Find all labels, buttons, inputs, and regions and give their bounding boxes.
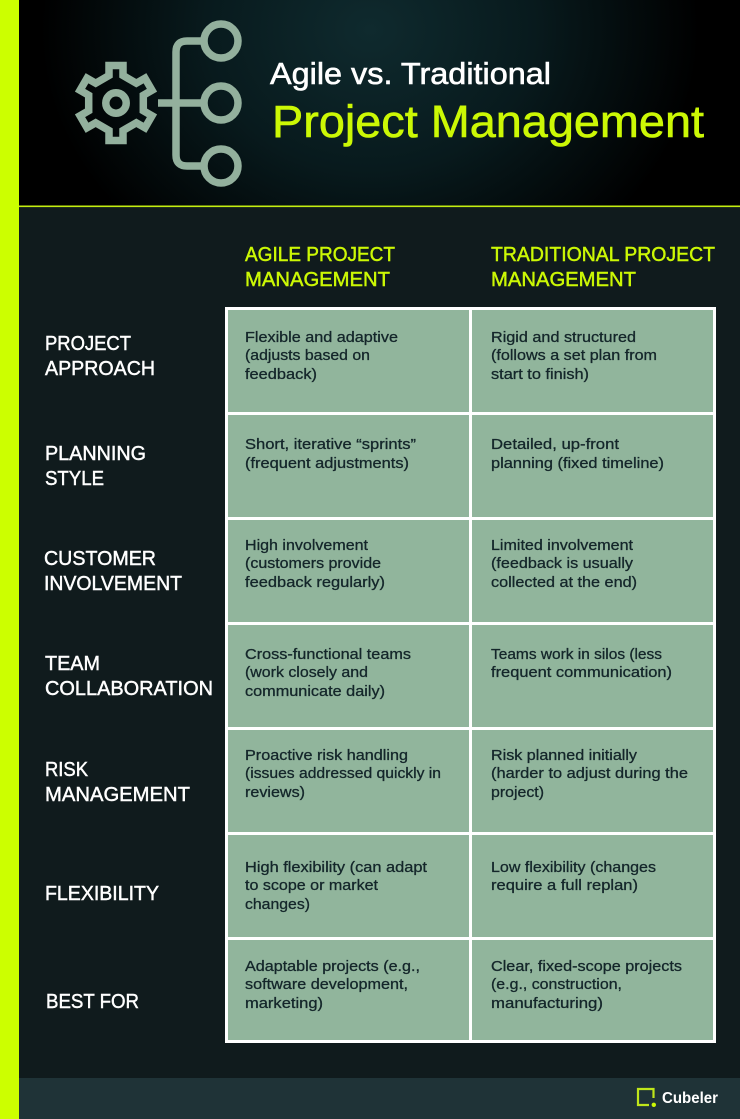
- cell: traditional collaboration: [491, 646, 672, 681]
- column heading: traditional: MANAGEMENT: [491, 269, 636, 291]
- cell: agile planning: Short, iterative “sprints”: [245, 436, 416, 453]
- cell: agile flexibility: [245, 859, 428, 913]
- cell: agile approach: (adjusts based on: [245, 347, 370, 364]
- cell: traditional customer involvement: [491, 537, 637, 591]
- cell: traditional planning: planning (fixed timeline): [491, 455, 664, 472]
- cell: traditional approach: [491, 329, 657, 383]
- cell: traditional collaboration: Teams work in silos (less: [491, 646, 662, 663]
- row label: planning style: PLANNING: [45, 443, 146, 465]
- title: [270, 56, 705, 147]
- lime side bar: [0, 0, 19, 1119]
- cell: agile best for: Adaptable projects (e.g.,: [245, 958, 420, 975]
- cell: traditional customer involvement: Limited involvement: [491, 537, 634, 554]
- row label: team collaboration: [45, 653, 213, 700]
- row label: risk management: [45, 759, 190, 806]
- cell: traditional best for: Clear, fixed-scope projects: [491, 958, 682, 975]
- row label: team collaboration: COLLABORATION: [45, 678, 213, 700]
- row label: project approach: APPROACH: [45, 358, 155, 380]
- cell: traditional collaboration: frequent communication): [491, 664, 672, 681]
- cell: agile collaboration: [245, 646, 411, 700]
- cell: traditional planning: [491, 436, 664, 472]
- cell: agile flexibility: changes): [245, 896, 310, 913]
- row label: planning style: STYLE: [45, 468, 104, 490]
- cell: agile customer involvement: (customers provide: [245, 555, 381, 572]
- title: Agile vs. Traditional: [270, 56, 551, 91]
- row label: flexibility: FLEXIBILITY: [45, 883, 159, 905]
- cell: agile collaboration: Cross-functional teams: [245, 646, 411, 663]
- cell: agile approach: feedback): [245, 366, 317, 383]
- cell: traditional approach: (follows a set plan from: [491, 347, 657, 364]
- row label: customer involvement: CUSTOMER: [44, 548, 156, 570]
- column heading: agile: MANAGEMENT: [245, 269, 390, 291]
- cell: traditional planning: Detailed, up-front: [491, 436, 620, 453]
- cell: agile risk: [245, 747, 441, 801]
- cell: traditional risk: Risk planned initially: [491, 747, 638, 764]
- column heading: agile: AGILE PROJECT: [245, 244, 395, 266]
- column heading: traditional: TRADITIONAL PROJECT: [491, 244, 715, 266]
- cell: traditional customer involvement: (feedback is usually: [491, 555, 634, 572]
- cell: traditional risk: (harder to adjust during the: [491, 765, 688, 782]
- cell: agile flexibility: to scope or market: [245, 877, 379, 894]
- column heading: agile: [245, 244, 395, 291]
- cell: agile best for: [245, 958, 420, 1012]
- title: Project Management: [272, 96, 705, 147]
- row label: best for: BEST FOR: [46, 991, 139, 1013]
- cell: agile planning: (frequent adjustments): [245, 455, 409, 472]
- cell: agile best for: software development,: [245, 976, 408, 993]
- logo: Cubeler: [638, 1089, 718, 1107]
- cell: agile approach: Flexible and adaptive: [245, 329, 398, 346]
- cell: agile customer involvement: [245, 537, 385, 591]
- cell: traditional flexibility: [491, 859, 656, 894]
- cell: traditional risk: [491, 747, 688, 801]
- cell: traditional flexibility: require a full replan): [491, 877, 638, 894]
- cell: agile risk: Proactive risk handling: [245, 747, 408, 764]
- cell: agile best for: marketing): [245, 995, 323, 1012]
- cell: traditional risk: project): [491, 784, 544, 801]
- row label: planning style: [45, 443, 146, 490]
- row label: customer involvement: [44, 548, 182, 595]
- icon: gear with branching tree: [80, 24, 238, 183]
- cell: agile risk: reviews): [245, 784, 305, 801]
- cell: agile customer involvement: feedback regularly): [245, 574, 385, 591]
- row label: risk management: RISK: [45, 759, 89, 781]
- cell: agile customer involvement: High involvement: [245, 537, 369, 554]
- logo: Cubeler: Cubeler: [662, 1090, 718, 1107]
- cell: agile collaboration: (work closely and: [245, 664, 368, 681]
- cell: traditional best for: [491, 958, 682, 1012]
- footer bar: [19, 1078, 740, 1119]
- row label: risk management: MANAGEMENT: [45, 784, 190, 806]
- icon: branch nodes: [204, 24, 238, 183]
- cell: traditional flexibility: Low flexibility (changes: [491, 859, 656, 876]
- table grid: [225, 307, 716, 1043]
- cell: traditional customer involvement: collected at the end): [491, 574, 637, 591]
- row label: customer involvement: INVOLVEMENT: [44, 573, 182, 595]
- row label: team collaboration: TEAM: [45, 653, 100, 675]
- icon: branch lines: [158, 41, 205, 166]
- row label: project approach: [45, 333, 155, 380]
- icon: gear: [80, 66, 152, 140]
- cell: agile planning: [245, 436, 416, 472]
- cell: agile collaboration: communicate daily): [245, 683, 385, 700]
- cell: traditional best for: (e.g., construction,: [491, 976, 622, 993]
- header banner: [19, 0, 740, 207]
- cell: agile risk: (issues addressed quickly in: [245, 765, 441, 782]
- column heading: traditional: [491, 244, 715, 291]
- cell: traditional best for: manufacturing): [491, 995, 603, 1012]
- comparison table: [225, 307, 716, 1043]
- cell: agile flexibility: High flexibility (can adapt: [245, 859, 428, 876]
- cell: agile approach: [245, 329, 398, 383]
- cell: traditional approach: start to finish): [491, 366, 589, 383]
- row label: project approach: PROJECT: [45, 333, 131, 355]
- cell: traditional approach: Rigid and structured: [491, 329, 636, 346]
